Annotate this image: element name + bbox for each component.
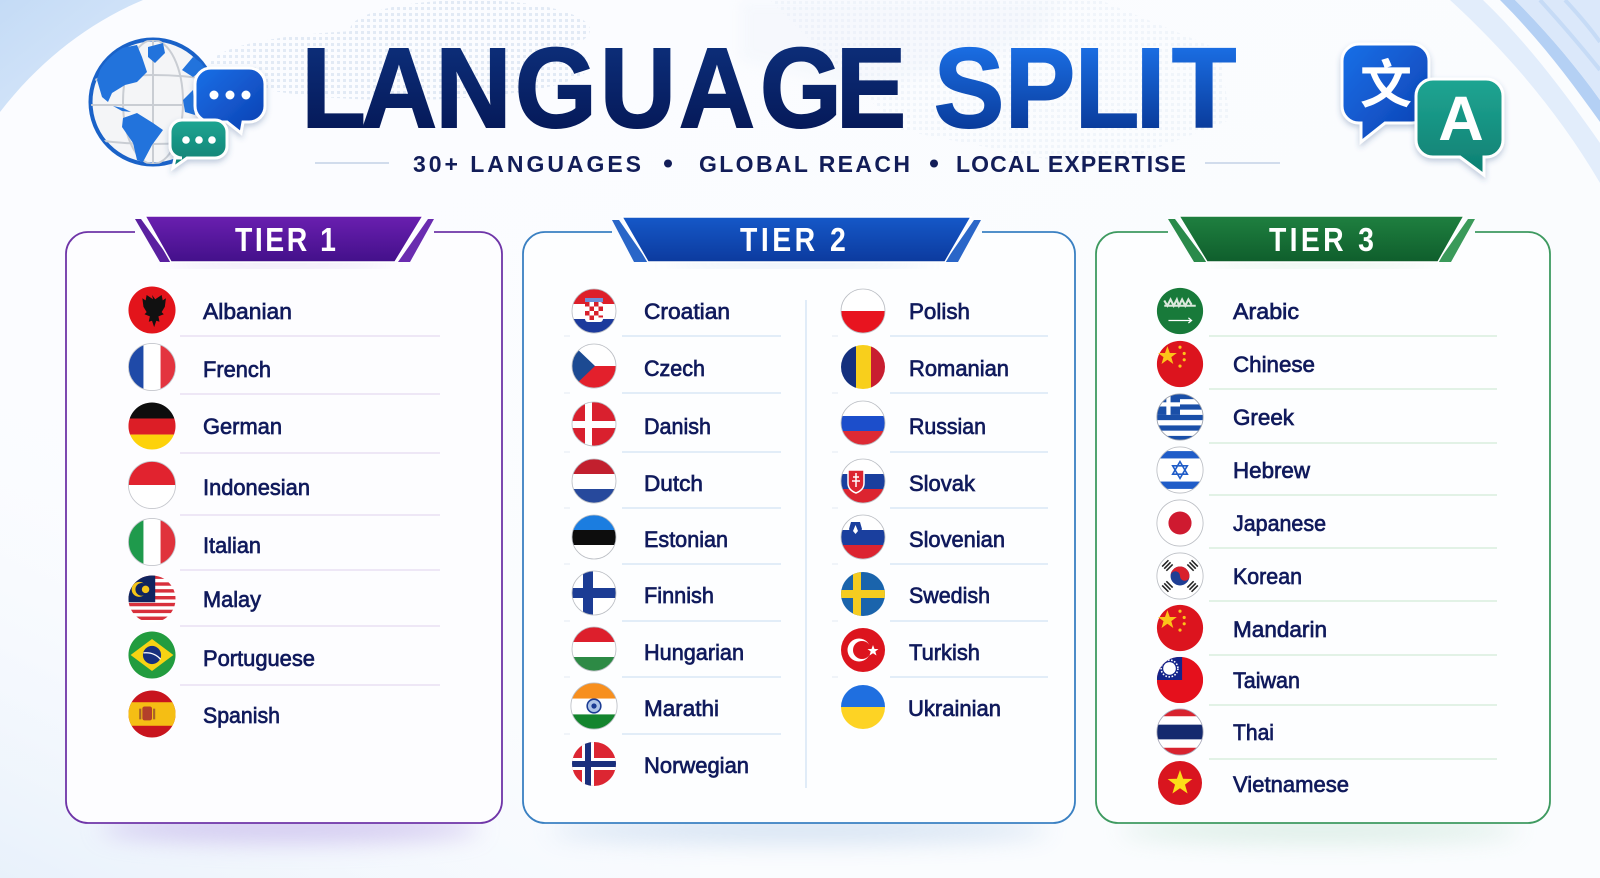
label: Finnish: Finnish	[644, 583, 714, 608]
flag: Japan	[1157, 500, 1203, 546]
flag: Denmark	[572, 402, 616, 446]
label: Romanian: Romanian	[909, 356, 1009, 381]
label: Taiwan: Taiwan	[1233, 668, 1300, 693]
label: Marathi: Marathi	[644, 696, 719, 721]
label: Hebrew: Hebrew	[1233, 458, 1311, 483]
row: Portuguese	[128, 631, 315, 679]
row: Korean	[1157, 553, 1302, 599]
header icon: globe with chat bubbles	[90, 38, 265, 168]
title: SPLIT	[934, 26, 1236, 152]
label: French: French	[203, 357, 271, 382]
row: Japanese	[1157, 500, 1326, 546]
flag: Greece	[1157, 394, 1203, 440]
label: Greek: Greek	[1233, 405, 1295, 430]
label: Norwegian: Norwegian	[644, 753, 749, 778]
label: Dutch: Dutch	[644, 471, 703, 496]
row: Polish	[841, 289, 970, 333]
flag: Slovakia	[841, 459, 885, 503]
label: Turkish: Turkish	[909, 640, 980, 665]
flag: Indonesia	[128, 461, 176, 509]
row: Estonian	[572, 515, 728, 559]
flag: Italy	[128, 518, 176, 566]
banner: tier 2	[612, 217, 981, 267]
row: Danish	[572, 402, 711, 446]
row: Mandarin	[1157, 605, 1327, 651]
banner: tier 1	[135, 216, 434, 267]
label: Danish: Danish	[644, 414, 711, 439]
flag: France	[128, 343, 176, 391]
subtitle: GLOBAL REACH	[699, 151, 910, 177]
row: Ukrainian	[841, 685, 1001, 729]
row: Finnish	[572, 571, 714, 615]
title: LANGUAGE	[302, 26, 906, 152]
flag: Hungary	[572, 627, 616, 671]
heading: tier 1: TIER 1	[235, 221, 336, 259]
flag: Malaysia	[128, 575, 176, 623]
label: Italian: Italian	[203, 533, 261, 558]
flag: China	[1157, 605, 1203, 651]
row: Indonesian	[128, 461, 310, 509]
row: Hungarian	[572, 627, 744, 671]
heading: tier 3: TIER 3	[1269, 221, 1374, 259]
label: Malay: Malay	[203, 587, 262, 612]
panel: tier 3	[1096, 216, 1550, 823]
label: Czech: Czech	[644, 356, 705, 381]
panel: tier 2	[523, 217, 1075, 823]
flag: Slovenia	[841, 515, 885, 559]
row: Swedish	[841, 572, 990, 616]
row: Italian	[128, 518, 261, 566]
flag: Israel	[1157, 447, 1203, 493]
row: Slovak	[841, 459, 976, 503]
row: Hebrew	[1157, 447, 1311, 493]
row: Slovenian	[841, 515, 1005, 559]
row: Croatian	[572, 289, 730, 333]
label: Estonian: Estonian	[644, 527, 728, 552]
row: Vietnamese	[1158, 761, 1349, 805]
row: Chinese	[1157, 341, 1315, 387]
row: Dutch	[572, 459, 703, 503]
label: Japanese: Japanese	[1233, 511, 1326, 536]
row: Marathi	[571, 683, 719, 729]
flag: Croatia	[572, 289, 616, 333]
flag: Germany	[128, 402, 176, 450]
icon: blue bubble with CJK glyph	[1342, 44, 1429, 142]
flag: Finland	[572, 571, 616, 615]
row: Czech	[572, 344, 705, 388]
title	[302, 26, 1236, 152]
header icon: translate bubbles	[1342, 44, 1503, 175]
panel: tier 1	[66, 216, 502, 823]
row: Malay	[128, 575, 262, 623]
flag: Brazil	[128, 631, 176, 679]
label: Ukrainian: Ukrainian	[908, 696, 1001, 721]
banner: tier 3	[1168, 216, 1475, 267]
flag: Ukraine	[841, 685, 885, 729]
flag: Vietnam	[1158, 761, 1202, 805]
row: Greek	[1157, 394, 1295, 440]
label: Thai: Thai	[1233, 720, 1274, 745]
flag: Poland	[841, 289, 885, 333]
flag: Netherlands	[572, 459, 616, 503]
flag: Czech Republic	[572, 344, 616, 388]
label: Spanish: Spanish	[203, 703, 280, 728]
flag: Spain	[128, 690, 176, 738]
label: Mandarin: Mandarin	[1233, 617, 1327, 642]
icon: green chat bubble	[170, 120, 227, 168]
row: Russian	[841, 401, 986, 445]
label: Hungarian: Hungarian	[644, 640, 744, 665]
flag: South Korea	[1157, 553, 1203, 599]
flag: Saudi Arabia	[1157, 288, 1203, 334]
row: Norwegian	[572, 742, 749, 786]
flag: Romania	[841, 345, 885, 389]
panel shadows	[100, 813, 1520, 843]
label: Slovenian: Slovenian	[909, 527, 1005, 552]
label: Arabic: Arabic	[1233, 299, 1299, 324]
flag: Thailand	[1157, 709, 1203, 755]
label: Chinese: Chinese	[1233, 352, 1315, 377]
label: Korean: Korean	[1233, 564, 1302, 589]
subtitle: LOCAL EXPERTISE	[956, 151, 1186, 177]
row: Albanian	[128, 286, 292, 334]
row: French	[128, 343, 271, 391]
icon: blue chat bubble	[195, 68, 265, 133]
subtitle	[315, 151, 1280, 177]
flag: Russia	[841, 401, 885, 445]
flag: Albania	[128, 286, 176, 334]
label: Albanian: Albanian	[203, 299, 292, 324]
label: Slovak: Slovak	[909, 471, 976, 496]
icon: green bubble with letter A: A	[1438, 84, 1484, 154]
label: Indonesian: Indonesian	[203, 475, 310, 500]
flag: Taiwan	[1157, 657, 1203, 703]
flag: India	[571, 683, 617, 729]
label: Swedish: Swedish	[909, 583, 990, 608]
heading: tier 2: TIER 2	[740, 221, 846, 259]
label: Vietnamese: Vietnamese	[1233, 772, 1349, 797]
flag: Turkey	[841, 628, 885, 672]
subtitle: 30+ LANGUAGES	[413, 151, 641, 177]
flag: Estonia	[572, 515, 616, 559]
flag: Norway	[572, 742, 616, 786]
row: German	[128, 402, 282, 450]
row: Spanish	[128, 690, 280, 738]
icon: green bubble with letter A	[1416, 79, 1503, 175]
label: Russian: Russian	[909, 414, 986, 439]
icon: globe	[90, 38, 216, 166]
background: dotted world map	[210, 0, 1230, 170]
flag: Sweden	[841, 572, 885, 616]
row: Romanian	[841, 345, 1009, 389]
icon: blue bubble with CJK glyph: 文	[1360, 57, 1412, 115]
row: Thai	[1157, 709, 1274, 755]
label: Croatian: Croatian	[644, 299, 730, 324]
label: Polish: Polish	[909, 299, 970, 324]
row: Arabic	[1157, 288, 1299, 334]
flag: China	[1157, 341, 1203, 387]
row: Turkish	[841, 628, 980, 672]
label: German: German	[203, 414, 282, 439]
row: Taiwan	[1157, 657, 1300, 703]
label: Portuguese: Portuguese	[203, 646, 315, 671]
